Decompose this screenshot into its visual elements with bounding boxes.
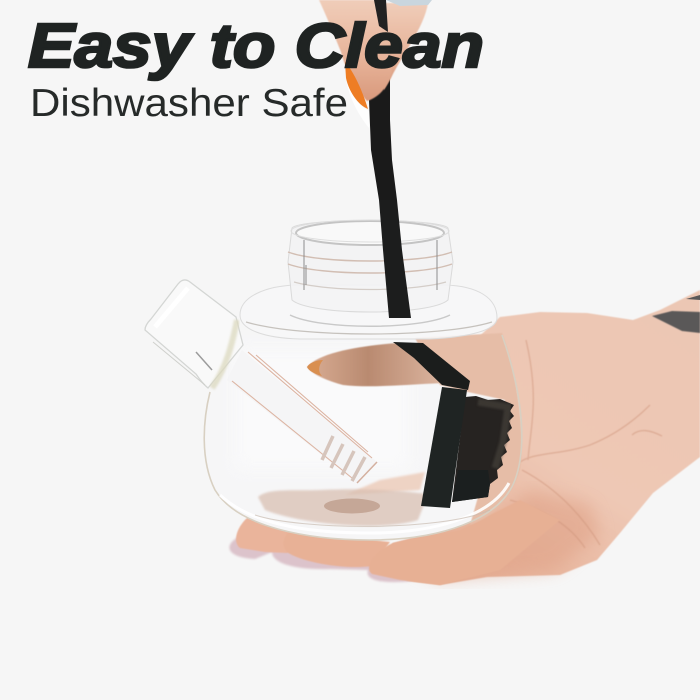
handle upper <box>369 74 397 200</box>
brush neck <box>393 342 470 390</box>
brush bristles <box>452 396 514 502</box>
title: Easy to Clean <box>28 12 484 81</box>
nail highlight <box>346 80 369 128</box>
finger two <box>283 531 390 567</box>
downstem <box>227 350 377 483</box>
handle inside neck <box>379 200 411 318</box>
left finger <box>319 0 392 101</box>
spout bowl <box>145 280 243 388</box>
neck <box>288 220 453 312</box>
orange nail <box>345 62 368 109</box>
finger three <box>369 500 560 585</box>
palm creases <box>510 340 662 548</box>
stem slits <box>322 436 365 481</box>
glass pipe <box>145 220 522 540</box>
right finger <box>372 3 428 90</box>
hand seen through glass <box>415 333 522 525</box>
bristle tone <box>478 402 508 468</box>
glass body <box>204 335 522 540</box>
upper fingers <box>319 0 432 128</box>
glass base reflection <box>258 489 428 526</box>
hand holding the glass <box>229 290 700 585</box>
subtitle: Dishwasher Safe <box>30 82 348 125</box>
fingernail shadows <box>229 535 412 582</box>
brush base <box>452 470 490 502</box>
body highlight <box>235 350 410 470</box>
brush head <box>421 387 467 508</box>
finger through glass <box>307 343 443 386</box>
hand seen through glass base <box>345 472 425 495</box>
lower palm shading <box>400 490 600 580</box>
cleaning brush <box>369 74 514 508</box>
tattoo <box>652 311 700 333</box>
handle top <box>374 0 388 32</box>
fingernail <box>307 360 323 376</box>
spout joint <box>212 320 237 388</box>
finger one <box>236 513 300 553</box>
palm and arm <box>370 290 700 585</box>
collar <box>240 285 497 339</box>
body outline <box>204 335 522 540</box>
sleeve <box>386 0 432 6</box>
